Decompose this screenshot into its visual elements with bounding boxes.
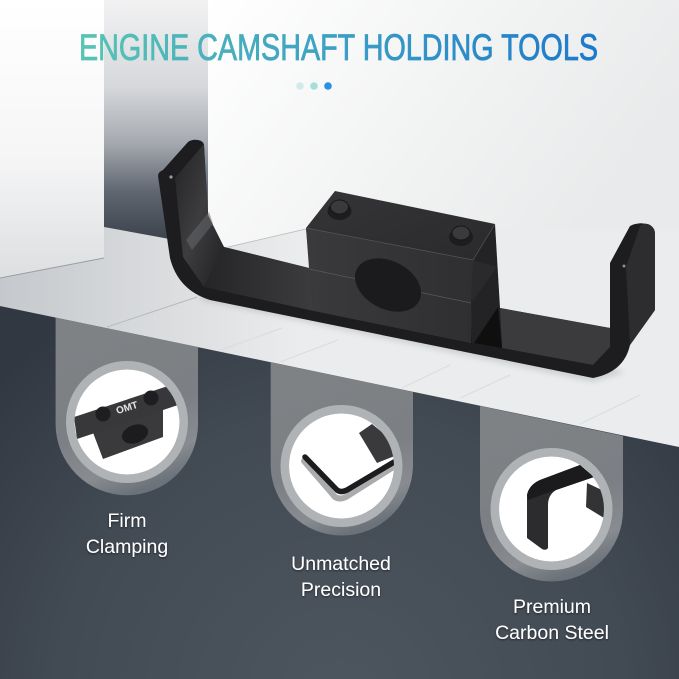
label: Firm [108, 510, 146, 532]
ring [490, 448, 612, 570]
clamp block [306, 191, 502, 348]
base plate left [204, 247, 314, 311]
badge [480, 406, 623, 582]
bolts [328, 200, 473, 246]
tool soft shadow [200, 280, 625, 382]
background wall [0, 0, 679, 460]
base plate right [500, 308, 610, 365]
ring [66, 361, 188, 483]
pagination dots [296, 82, 332, 90]
recessed dark column [104, 0, 208, 246]
label: Clamping [86, 536, 168, 558]
badge [56, 318, 198, 495]
left arm inner face [169, 144, 224, 287]
badge [271, 362, 413, 536]
feature 1: firm clamping [56, 318, 198, 558]
image circle [499, 456, 606, 562]
right arm [622, 224, 655, 345]
camshaft holding tool [158, 140, 655, 382]
image circle [74, 370, 180, 474]
label: Premium [513, 596, 591, 618]
feature 3: premium carbon steel [480, 406, 623, 644]
feature 2: unmatched precision [271, 362, 413, 601]
dark lower panel [0, 306, 679, 679]
shelf surface [0, 227, 679, 447]
label: Carbon Steel [495, 622, 609, 644]
ring [280, 405, 402, 527]
tool silhouette and band [158, 140, 655, 378]
label: Precision [301, 579, 381, 601]
image circle: OMT [115, 400, 139, 417]
label: Unmatched [291, 553, 391, 575]
image circle [289, 414, 398, 518]
